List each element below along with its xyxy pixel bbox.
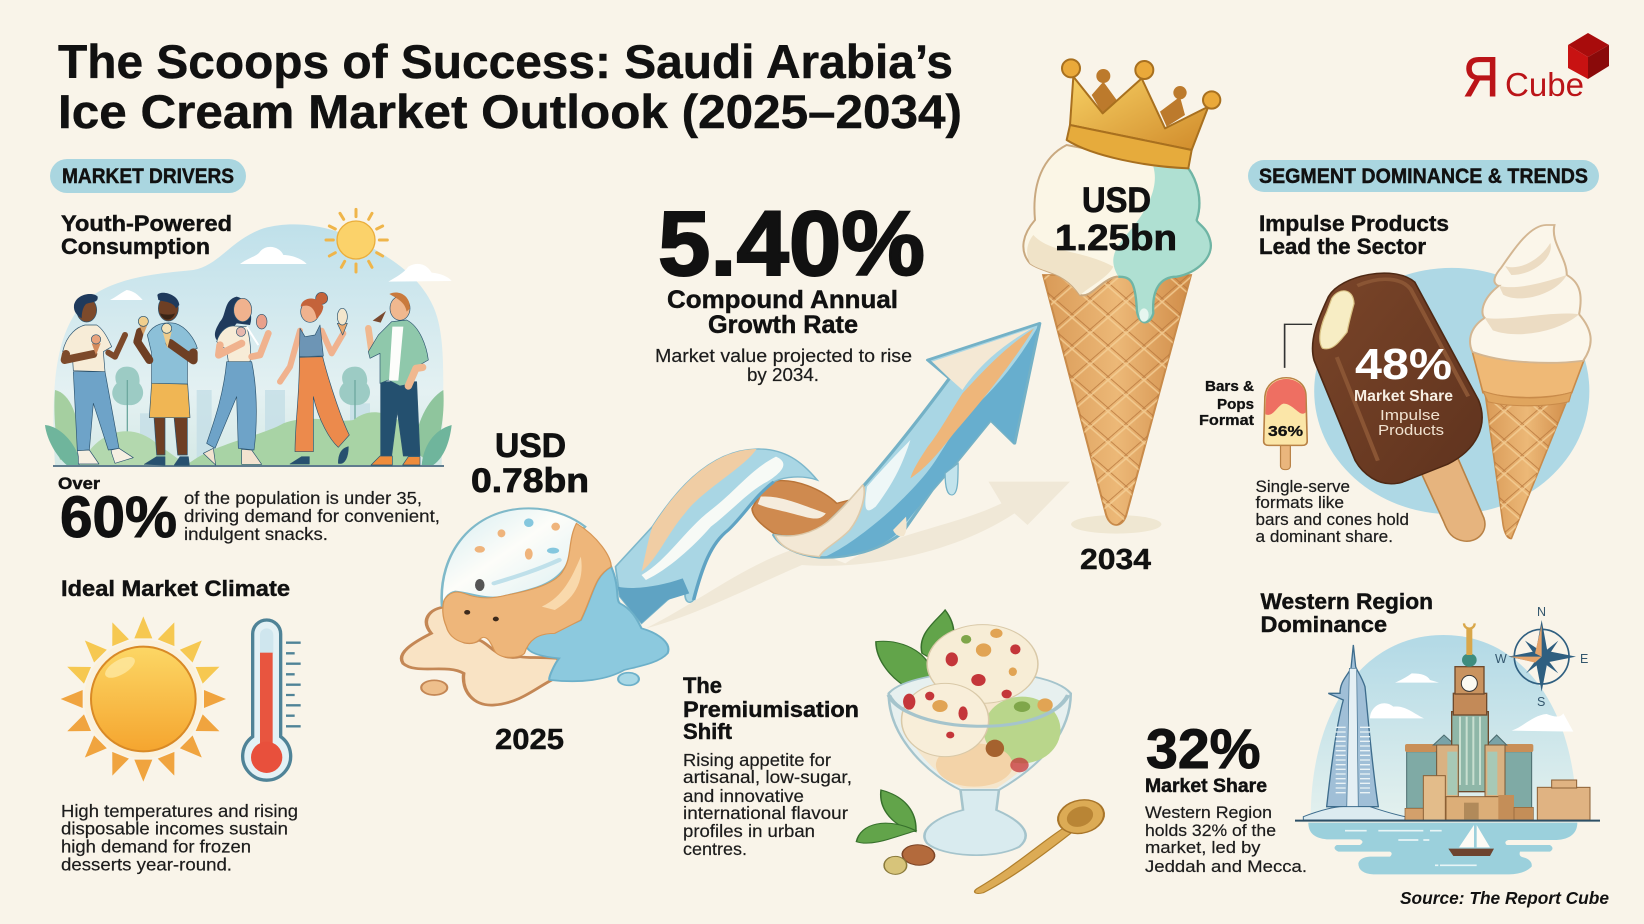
melted scoop illustration (401, 508, 668, 705)
text: western region description: Western Region (1145, 803, 1272, 822)
heading: the premiumisation shift: Shift (683, 719, 732, 744)
heading: impulse products lead the sector: Lead the Sector (1259, 234, 1426, 259)
text: premiumisation description: and innovative (683, 786, 804, 806)
person 1 (63, 294, 133, 464)
crown (1062, 59, 1220, 168)
compass letters: E (1580, 652, 1588, 666)
stat: 5.40% CAGR: Compound Annual (667, 286, 898, 314)
text: climate description: desserts year-round. (61, 854, 232, 874)
text: single-serve formats: bars and cones hold (1256, 511, 1409, 529)
heading: impulse products lead the sector (1259, 211, 1449, 259)
clock tower (1405, 623, 1590, 820)
illustration: young people eating ice cream in a park (45, 209, 452, 466)
label: bars and pops format: Bars & (1205, 378, 1254, 395)
logo: RCube: Cube (1505, 66, 1584, 103)
small ice pop (1264, 378, 1307, 470)
value: USD 1.25bn: USD (1082, 181, 1151, 220)
logo: RCube: Я (1463, 45, 1499, 108)
text: market value note: by 2034. (747, 364, 819, 385)
person 3 (203, 297, 268, 465)
value on bar: 48% market share: Products (1378, 422, 1444, 439)
heading: youth-powered consumption: Consumption (61, 234, 210, 259)
heading: the premiumisation shift: The (683, 673, 722, 698)
waffle cone (1043, 275, 1191, 525)
compass letters: S (1537, 695, 1545, 709)
text: population description: driving demand for convenient, (184, 506, 440, 526)
text: climate description: disposable incomes sustain (61, 818, 288, 838)
title (58, 35, 962, 138)
heading: impulse products lead the sector: Impulse Products (1259, 211, 1449, 236)
stat: 5.40% CAGR: 5.40% (658, 193, 925, 295)
heading pill: market drivers (50, 159, 246, 193)
value on bar: 48% market share: 48% (1355, 340, 1452, 389)
text: single-serve formats: Single-serve (1256, 478, 1350, 496)
heading pill: segment dominance and trends (1248, 160, 1599, 192)
value on bar: 48% market share (1354, 340, 1453, 439)
value: USD 1.25bn (1055, 181, 1177, 258)
text: premiumisation description: international flavour (683, 803, 848, 823)
value: USD 0.78bn: USD (495, 427, 566, 465)
arrow shadow (646, 482, 1070, 628)
year: 2034: 2034 (1080, 544, 1151, 576)
value: USD 1.25bn: 1.25bn (1055, 217, 1177, 258)
illustration: impulse products (1264, 225, 1591, 541)
soft serve cone (1470, 225, 1591, 539)
tower (1303, 645, 1405, 820)
icon: thermometer (243, 620, 301, 780)
text: western region description: market, led by (1145, 838, 1261, 857)
value: 36%: 36% (1268, 423, 1303, 440)
heading: the premiumisation shift (683, 673, 859, 744)
text: premiumisation description (683, 750, 852, 859)
icon: sun (61, 616, 226, 782)
text: climate description: High temperatures and rising (61, 801, 298, 821)
heading: western region dominance: Western Region (1260, 589, 1433, 614)
compass letters: W (1495, 652, 1507, 666)
label: bars and pops format: Pops (1217, 396, 1254, 413)
text: population description: indulgent snacks. (184, 524, 328, 544)
ice cream scoop (1023, 145, 1211, 322)
golden spoon (975, 795, 1112, 893)
label: bars and pops format (1199, 378, 1254, 429)
text: population description (184, 488, 440, 544)
text: western region description: holds 32% of the (1145, 821, 1276, 840)
water with boat (1308, 823, 1577, 874)
text: single-serve formats (1256, 478, 1409, 546)
text: market value note (655, 345, 912, 385)
value: USD 0.78bn: 0.78bn (471, 462, 589, 500)
label: bars and pops format: Format (1199, 412, 1254, 429)
year: 2025: 2025 (495, 724, 564, 756)
value on bar: 48% market share: Impulse (1380, 407, 1440, 424)
stat: over 60%: 60% (60, 485, 177, 550)
heading: ideal market climate: Ideal Market Climate (61, 576, 290, 601)
text: premiumisation description: artisanal, low-sugar, (683, 767, 852, 787)
text: single-serve formats: formats like (1256, 494, 1344, 512)
text: climate description (61, 801, 298, 874)
title: The Scoops of Success: Saudi Arabia’s (58, 35, 953, 88)
big waffle cone with crown (1023, 59, 1220, 534)
person 4 (280, 292, 349, 464)
logo: RCube (1463, 33, 1609, 108)
text: western region description (1145, 803, 1307, 876)
stat: over 60%: Over (58, 474, 100, 493)
text: premiumisation description: profiles in urban (683, 821, 815, 841)
heading: youth-powered consumption (61, 211, 232, 259)
compass (1508, 620, 1576, 692)
text: single-serve formats: a dominant share. (1256, 528, 1393, 546)
illustration: gelato sundae with spoon (856, 610, 1112, 893)
chocolate ice cream bar (1313, 273, 1485, 541)
heading: youth-powered consumption: Youth-Powered (61, 211, 232, 236)
text: population description: of the population is under 35, (184, 488, 422, 508)
text: market value note: Market value projected to rise (655, 345, 912, 366)
text: premiumisation description: Rising appetite for (683, 750, 831, 770)
source note: Source: The Report Cube (1400, 888, 1609, 908)
stat: 32% market share: 32% (1146, 717, 1260, 780)
icon: small sun (326, 209, 387, 272)
title: Ice Cream Market Outlook (2025–2034) (58, 85, 962, 138)
heading: western region dominance: Dominance (1260, 612, 1387, 637)
stat: 5.40% CAGR (658, 193, 925, 339)
compass letters: N (1537, 605, 1546, 619)
illustration: western region skyline (1295, 620, 1600, 874)
stat: 5.40% CAGR: Growth Rate (708, 311, 858, 339)
text: western region description: Jeddah and Mecca. (1145, 857, 1307, 876)
heading: the premiumisation shift: Premiumisation (683, 697, 859, 722)
text: premiumisation description: centres. (683, 839, 747, 859)
text: climate description: high demand for frozen (61, 836, 251, 856)
glass bowl (889, 672, 1071, 790)
person 5 (368, 292, 428, 465)
stat: 32% market share: Market Share (1145, 776, 1267, 797)
value on bar: 48% market share: Market Share (1354, 388, 1453, 405)
growth arrow: melting ribbon (616, 323, 1040, 623)
value: USD 0.78bn (471, 427, 589, 500)
leaves and nuts (856, 790, 940, 874)
compass letters (1495, 605, 1588, 709)
heading pill: market drivers: MARKET DRIVERS (62, 165, 234, 188)
heading: western region dominance (1260, 589, 1433, 637)
heading pill: segment dominance and trends: SEGMENT DOMINANCE & TRENDS (1259, 165, 1588, 188)
person 2 (137, 293, 197, 465)
